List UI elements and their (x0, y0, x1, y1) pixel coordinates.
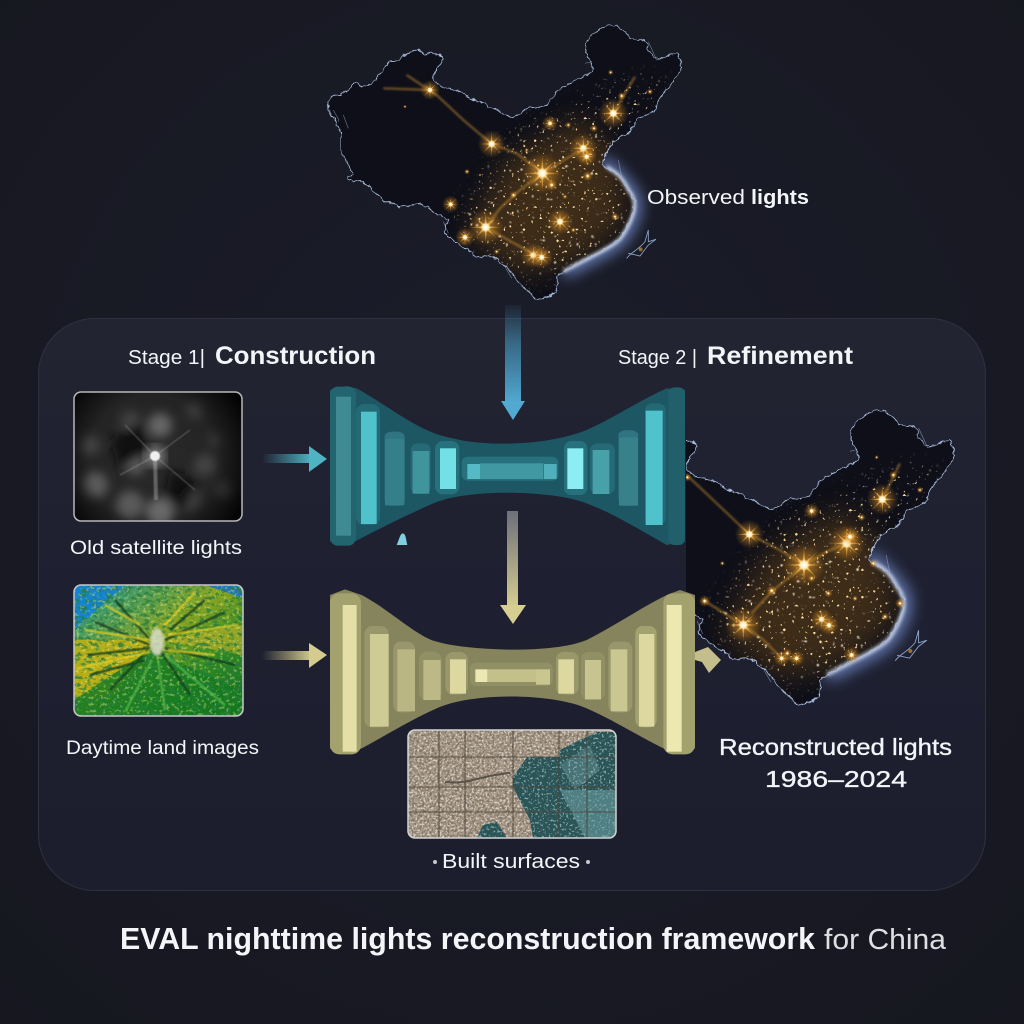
cylinder: encoder 4 (419, 652, 442, 700)
cylinder: decoder 2 (645, 403, 666, 525)
cylinder: encoder 5 (445, 652, 468, 695)
U-net: teal network (330, 386, 685, 546)
label: reconstructed lights: 1986–2024 (765, 766, 907, 792)
label: observed lights: lights (751, 186, 809, 209)
map: observed lights (320, 20, 687, 303)
label: daytime land images: Daytime land images (66, 738, 259, 759)
cylinder: decoder 1 (663, 593, 695, 754)
cylinder: encoder 2 (356, 404, 380, 525)
cylinder: decoder 5 (556, 652, 579, 695)
arrow: stage 1 to stage 2 (500, 511, 526, 624)
image: daytime land (74, 585, 243, 716)
stage 2 heading: Refinement (707, 342, 854, 370)
image: built surfaces (408, 730, 616, 838)
label: built surfaces: Built surfaces (442, 851, 580, 873)
cylinder: encoder 3 (393, 642, 415, 712)
cylinder: encoder 1 (330, 593, 361, 754)
cylinder: encoder 5 (435, 441, 459, 494)
title: EVAL nighttime lights reconstruction framework (120, 921, 816, 956)
label: reconstructed lights: Reconstructed lights (719, 734, 952, 760)
arrow: daytime land to stage 1 (262, 643, 327, 668)
small teal marker (397, 533, 407, 545)
block: bottleneck (462, 457, 558, 481)
title: for China (824, 924, 947, 956)
cylinder: encoder 4 (411, 443, 431, 494)
cylinder: encoder 1 (330, 387, 356, 546)
cylinder: decoder 1 (668, 387, 685, 545)
block: bottleneck (470, 663, 553, 686)
image: old satellite lights (74, 392, 242, 526)
map: reconstructed lights (686, 410, 955, 706)
cylinder: encoder 2 (364, 626, 389, 727)
cylinder: encoder 3 (384, 432, 405, 506)
cylinder: decoder 4 (581, 652, 605, 700)
stage 2 heading (618, 342, 854, 370)
cylinder: decoder 5 (564, 441, 587, 495)
label: old satellite lights: Old satellite lights (70, 538, 242, 559)
cylinder: decoder 3 (618, 430, 638, 506)
connector: olive tail to reconstructed map (695, 647, 721, 673)
arrow: old satellite to stage 1 (262, 446, 327, 472)
cylinder: decoder 2 (635, 626, 657, 727)
cylinder: decoder 4 (590, 443, 615, 494)
panel: framework stages (38, 318, 986, 890)
stage 2 heading: Stage 2 | (618, 347, 697, 369)
label: reconstructed lights (719, 734, 952, 792)
label: observed lights: Observed (647, 186, 745, 209)
label: observed lights (647, 186, 809, 209)
stage 1 heading (128, 342, 376, 370)
cylinder: decoder 3 (608, 642, 632, 712)
U-net: olive network (330, 589, 695, 754)
stage 1 heading: Stage 1| (128, 347, 205, 369)
stage 1 heading: Construction (215, 342, 376, 370)
arrow: observed lights to stage 2 (501, 305, 525, 420)
